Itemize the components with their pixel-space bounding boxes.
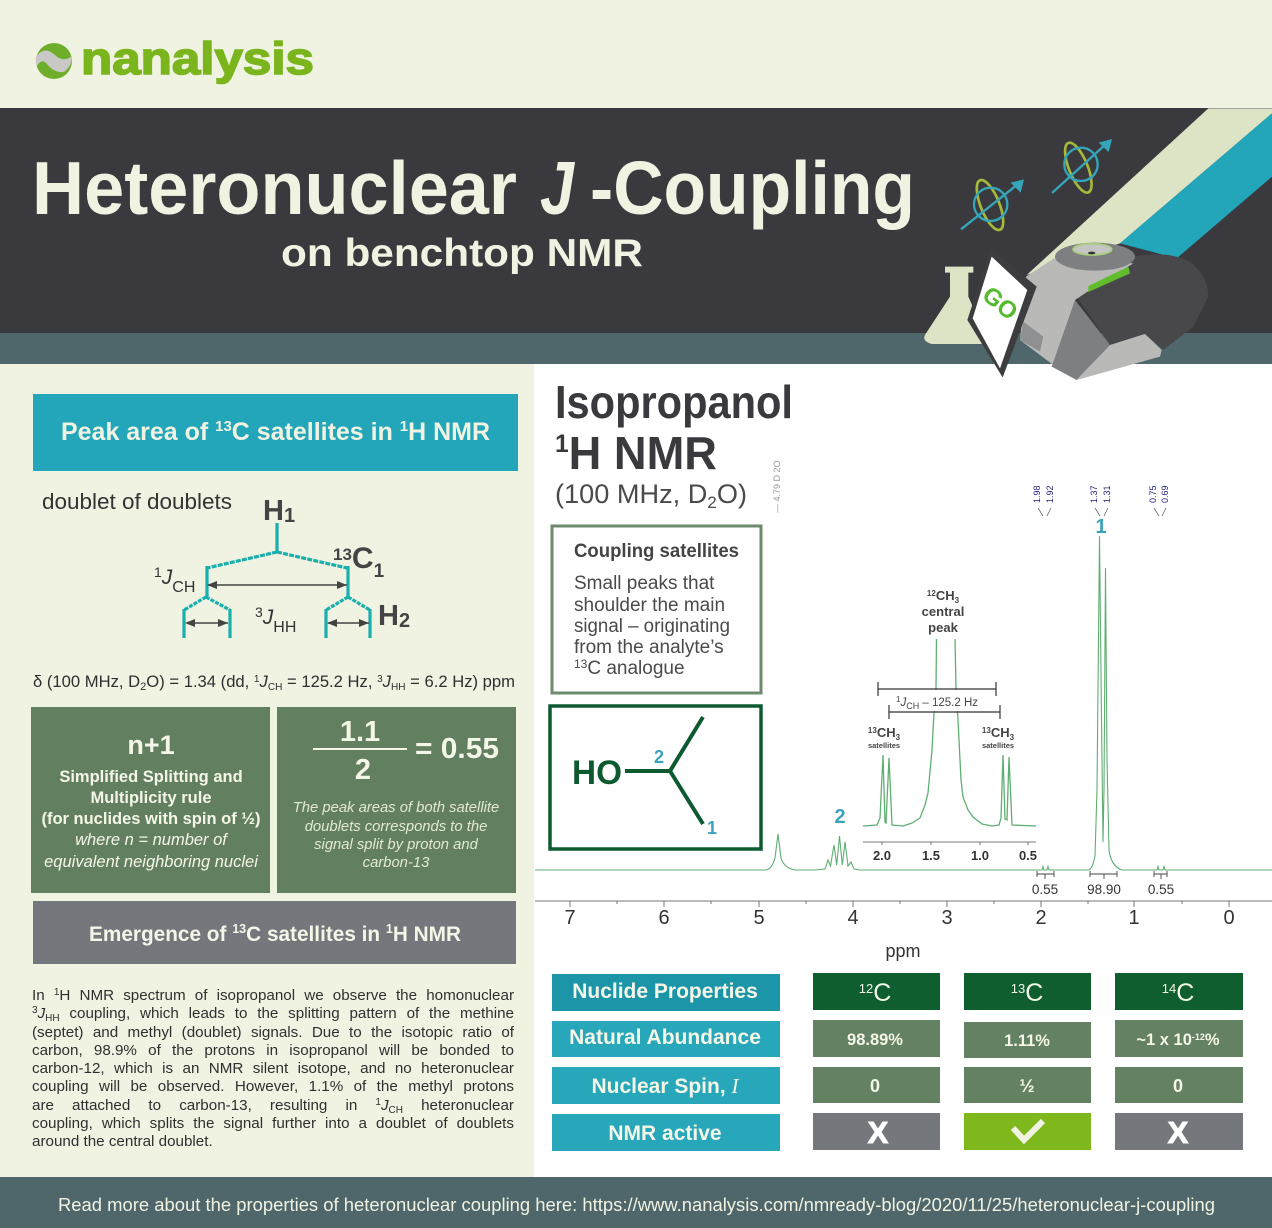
heading: emergence of satellites: C satellites in [246, 922, 386, 946]
panel: satellite ratio: The peak areas of both satellite [293, 800, 499, 816]
panel: satellite ratio: doublets corresponds to the [305, 819, 487, 835]
nuclear spin row [813, 1067, 1243, 1103]
callout: coupling satellites: C analogue [587, 658, 685, 679]
label: H2: 2 [399, 610, 410, 632]
panel: n+1 rule: where n = number of [75, 831, 229, 849]
callout: coupling satellites: Small peaks that [574, 573, 715, 594]
heading: peak area: 1 [400, 418, 408, 435]
icon: nuclear spin left [961, 177, 1024, 233]
x axis: 3 [941, 907, 953, 929]
natural abundance row: 98.89% [847, 1031, 903, 1049]
callout: coupling satellites: from the analyte’s [574, 637, 724, 658]
subtitle: on benchtop NMR [281, 232, 643, 275]
panel: n+1 rule: (for nuclides with spin of ½) [41, 810, 261, 828]
panel: n+1 rule: Simplified Splitting and [59, 768, 243, 786]
column headers: C [873, 979, 891, 1007]
heading: emergence of satellites: H NMR [393, 922, 461, 946]
label: central peak: central [922, 604, 964, 619]
integrals [1032, 871, 1174, 897]
NMR active row: X [1168, 1115, 1189, 1150]
heading: peak area: Peak area of [61, 418, 208, 446]
heading: emergence of satellites [33, 901, 516, 964]
x axis: 7 [564, 907, 576, 929]
coupling brackets: 1 [896, 695, 901, 704]
chart: 1H NMR spectrum [535, 460, 1272, 961]
column headers: 12 [859, 981, 873, 996]
instrument light body [1020, 257, 1133, 365]
splitting tree diagram [154, 495, 410, 638]
molecule: isopropanol [550, 706, 761, 849]
natural abundance row: ~1 x 10 [1136, 1031, 1192, 1049]
x axis [535, 901, 1272, 929]
title: -Coupling [590, 146, 915, 230]
peak forks [1038, 508, 1166, 516]
icon: nuclear spin right [1052, 139, 1112, 196]
icon: logo sphere [36, 43, 72, 79]
text block: explanation paragraph: around the central doublet. [32, 1133, 213, 1150]
title [32, 146, 915, 230]
nuclear spin row: 0 [1173, 1076, 1183, 1096]
callout: coupling satellites [552, 526, 761, 693]
x axis: 4 [847, 907, 859, 929]
label: right satellites: 13 [982, 726, 991, 735]
peak shift labels: 1.92 [1045, 485, 1055, 503]
beam: teal [1120, 113, 1272, 258]
coupling brackets: CH [906, 701, 919, 711]
text: chemical shift formula: J [382, 673, 392, 691]
label: central peak: 3 [955, 596, 960, 605]
text: conditions: O) [717, 479, 747, 509]
table: nuclide properties [552, 973, 1243, 1151]
heading: peak area [33, 394, 518, 471]
fraction [313, 716, 499, 786]
text: chemical shift formula: HH [391, 682, 406, 693]
label: left satellites [868, 725, 901, 750]
row labels [552, 974, 780, 1151]
natural abundance row [813, 1020, 1243, 1058]
peak shift labels: 1.98 [1032, 485, 1042, 503]
spectrum trace [535, 536, 1272, 870]
text block: explanation paragraph: In 1H NMR spectrum of isopropanol we observe the homonuclear [32, 987, 514, 1004]
label: 1JCH: J [161, 566, 173, 589]
panel: satellite ratio [277, 707, 516, 893]
text: chemical shift formula: = 125.2 Hz, [282, 673, 377, 691]
title: Heteronuclear [32, 146, 517, 230]
natural abundance row: % [1205, 1031, 1220, 1049]
x axis: 0 [1223, 907, 1235, 929]
peak shift labels [1032, 485, 1170, 503]
panel: n+1 rule: n+1 [127, 730, 175, 760]
text block: explanation paragraph: are attached to carbon-13, resulting in 1JCH heteronuclear [32, 1097, 514, 1116]
fraction: = 0.55 [415, 733, 499, 765]
tablet: GO [977, 281, 1023, 326]
label: left satellites: CH [877, 725, 896, 740]
text: chemical shift formula: O) = 1.34 (dd, [146, 673, 254, 691]
footer band: Read more about the properties of heteronuclear coupling here: https://www.nanalysis.com/nmready-blog/2020/11/25/heteronuclear-j-coupling [58, 1194, 1215, 1215]
coupling brackets: J [899, 697, 906, 709]
coupling arrows [185, 581, 369, 627]
text: chemical shift formula: CH [268, 682, 282, 693]
label: H1: 1 [284, 505, 295, 527]
peak shift labels: 0.75 [1148, 485, 1158, 503]
label: 3JHH: J [262, 606, 274, 629]
column headers: 14 [1162, 981, 1176, 996]
panel: title banner [0, 108, 1272, 333]
label: 1JCH: CH [172, 579, 195, 596]
text: chemical shift formula: 3 [377, 674, 383, 685]
natural abundance row: -12 [1192, 1032, 1205, 1042]
instrument base [1077, 334, 1162, 380]
x axis: 2 [1035, 907, 1047, 929]
panel: satellite ratio: carbon-13 [363, 855, 430, 871]
text block: explanation paragraph: coupling will be observed. However, 1.1% of the methyl protons [32, 1078, 514, 1095]
label: central peak: 12 [927, 589, 936, 598]
inset axis: 1.5 [922, 848, 940, 863]
column headers [813, 973, 1243, 1010]
panel: left column [0, 364, 534, 1177]
panel: satellite ratio: signal split by proton and [314, 837, 479, 853]
text: conditions: 2 [707, 493, 717, 512]
text block: explanation paragraph: carbon, 98.9% of the protons in isopropanol will be bonded to [32, 1042, 514, 1059]
footer band [0, 1177, 1272, 1228]
text: chemical shift formula: = 6.2 Hz) ppm [406, 673, 515, 691]
label: left satellites: satellites [868, 741, 900, 750]
icon: check mark [1013, 1121, 1043, 1140]
icon: flask [924, 267, 982, 344]
NMR active row [813, 1113, 1243, 1150]
nuclear spin row: ½ [1019, 1076, 1035, 1096]
label: 3JHH: HH [273, 619, 296, 636]
text: chemical shift formula: J [259, 673, 269, 691]
instrument top disc [1055, 243, 1135, 271]
instrument front face [1052, 300, 1110, 380]
column headers: 13 [1011, 981, 1025, 996]
inset axis [863, 842, 1037, 863]
panel: n+1 rule: equivalent neighboring nuclei [44, 853, 259, 871]
instrument dark body [1077, 254, 1208, 350]
inset axis: 1.0 [971, 848, 989, 863]
panel: logo band [0, 0, 1272, 108]
coupling brackets [878, 682, 1000, 719]
x axis: 1 [1128, 907, 1140, 929]
peak shift labels: 0.69 [1160, 485, 1170, 503]
inset trace [863, 639, 1036, 826]
column headers: C [1025, 979, 1043, 1007]
label: central peak [922, 588, 964, 635]
label: right satellites: satellites [982, 741, 1014, 750]
column headers: C [1176, 979, 1194, 1007]
label: right satellites [982, 725, 1015, 750]
text block: explanation paragraph: carbon-12, which is an NMR silent isotope, and no heteronuclear [32, 1060, 514, 1077]
axis label: ppm [885, 941, 921, 961]
integrals: 0.55 [1032, 882, 1058, 897]
NMR active row: X [868, 1115, 889, 1150]
text: chemical shift formula: 2 [140, 681, 146, 693]
label: 1JCH: 1 [154, 564, 162, 580]
label: 3JHH: 3 [255, 604, 263, 620]
molecule: isopropanol: 2 [654, 747, 664, 767]
coupling brackets: – 125.2 Hz [919, 697, 978, 709]
instrument slot [1020, 322, 1043, 352]
molecule: isopropanol: HO [572, 754, 622, 792]
beam: cream [1027, 108, 1272, 275]
heading: peak area: 13 [215, 418, 232, 435]
row labels: Nuclear Spin, I [591, 1074, 740, 1098]
peak shift labels: 1.31 [1102, 485, 1112, 503]
label: central peak: CH [936, 588, 955, 603]
peak label 2: 2 [834, 806, 846, 828]
logo wordmark: nanalysis [81, 33, 314, 84]
label: 13C1: 13 [333, 545, 352, 564]
label: right satellites: 3 [1010, 733, 1015, 742]
heading: isopropanol: Isopropanol [555, 376, 793, 428]
title: J [540, 146, 575, 230]
nuclear spin row: 0 [870, 1076, 880, 1096]
integrals: 98.90 [1087, 882, 1121, 897]
text: doublet of doublets: doublet of doublets [42, 489, 232, 514]
callout: coupling satellites: shoulder the main [574, 595, 725, 616]
heading: peak area: C satellites in [232, 418, 400, 446]
natural abundance row: 1.11% [1004, 1032, 1050, 1050]
text: chemical shift formula: δ (100 MHz, D [33, 673, 139, 691]
heading: emergence of satellites: 1 [386, 921, 393, 936]
text block: explanation paragraph: (septet) and methyl (doublet) signals. Due to the isotopic ratio of [32, 1024, 514, 1041]
molecule: isopropanol: 1 [707, 818, 717, 838]
label: H1: H [263, 495, 284, 527]
x axis: 6 [658, 907, 670, 929]
callout: coupling satellites: 13 [574, 657, 588, 671]
inset axis: 0.5 [1019, 848, 1037, 863]
heading: 1H NMR: 1 [555, 430, 569, 458]
peak label 1: 1 [1095, 516, 1107, 538]
illustration: benchtop NMR instrument [924, 108, 1272, 380]
heading: emergence of satellites: 13 [232, 921, 246, 936]
label: central peak: peak [928, 620, 959, 635]
heading: emergence of satellites: Emergence of [89, 922, 231, 946]
row labels: Nuclide Properties [572, 980, 758, 1003]
solvent peak label: — 4.79 D 2O [772, 460, 782, 513]
peak shift labels: 1.37 [1089, 485, 1099, 503]
label: left satellites: 13 [868, 726, 877, 735]
callout: coupling satellites: Coupling satellites [574, 541, 739, 562]
panel: slate stripe [0, 333, 1272, 364]
text block: explanation paragraph: coupling, which splits the signal further into a doublet of doublets [32, 1115, 514, 1132]
tree lines [184, 523, 370, 638]
row labels: Natural Abundance [569, 1026, 761, 1049]
text: chemical shift formula: 1 [254, 674, 260, 685]
label: 13C1: C [352, 542, 374, 575]
panel: n+1 rule [31, 707, 270, 893]
integrals: 0.55 [1148, 882, 1174, 897]
inset axis: 2.0 [873, 848, 891, 863]
fraction: 2 [355, 754, 371, 786]
text block: explanation paragraph: 3JHH coupling, which leads to the splitting pattern of the methine [32, 1005, 514, 1024]
instrument green strip [1088, 267, 1130, 292]
label: left satellites: 3 [896, 733, 901, 742]
tablet [967, 248, 1037, 377]
logo: nanalysis [36, 33, 314, 84]
heading: peak area: H NMR [408, 418, 490, 446]
chart: inset of methyl region [863, 588, 1037, 863]
heading: 1H NMR: H NMR [569, 427, 717, 479]
panel: n+1 rule: Multiplicity rule [90, 789, 212, 807]
text: conditions: (100 MHz, D [555, 479, 707, 509]
x axis: 5 [753, 907, 765, 929]
callout: coupling satellites: signal – originating [574, 616, 730, 637]
row labels: NMR active [608, 1122, 722, 1145]
text block: explanation paragraph [32, 987, 514, 1150]
fraction: 1.1 [340, 716, 380, 748]
label: 13C1: 1 [374, 561, 385, 582]
label: right satellites: CH [991, 725, 1010, 740]
label: H2: H [378, 600, 399, 632]
